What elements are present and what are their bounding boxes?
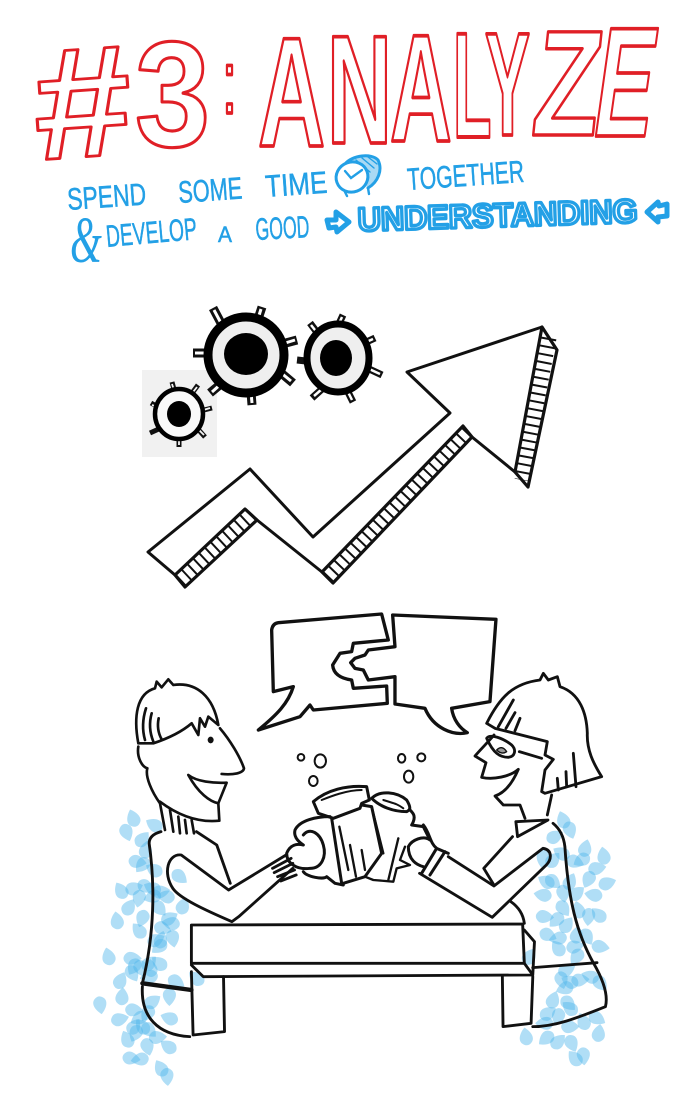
icon: left arrow [647,202,667,222]
title: : [222,32,237,132]
icon: large gear [193,307,297,405]
title: Z [527,0,610,167]
blue splatter [92,807,618,1087]
title: A [390,4,452,174]
left person: body and arm [142,832,296,1037]
subtitle line 1: TIME [264,165,328,204]
speech bubble: right puzzle piece [351,615,496,733]
title: # [27,11,138,194]
subtitle line 2 [70,203,310,276]
icon: small gear [150,382,212,447]
title: 3 [135,11,210,179]
title: N [327,4,392,176]
title: L [453,3,491,170]
icon: medium gear [297,315,382,402]
subtitle line 2: & [70,203,102,276]
subtitle line 1: TOGETHER [406,154,525,197]
table and right leg block [191,924,534,1035]
title: A [258,6,325,180]
title: Y [485,3,530,167]
subtitle line 2: A [218,222,232,247]
gray backing square [142,370,217,457]
title: E [585,0,668,169]
chart arrow [148,327,557,587]
beer mugs and hands [287,786,448,885]
beer bubbles [298,753,425,786]
speech bubble: left puzzle piece [258,614,388,730]
subtitle line 1: SOME [177,171,243,210]
subtitle line 2: GOOD [255,209,310,247]
icon: clock [332,156,380,197]
title [27,0,668,194]
left person: head [136,679,244,833]
right person: head [475,673,602,818]
keyword: understanding: UNDERSTANDING [357,192,638,238]
right person: body and arm [420,820,606,1027]
subtitle line 2: DEVELOP [105,211,198,254]
subtitle line 1: SPEND [66,177,147,217]
subtitle line 1 [66,154,525,217]
icon: right arrow [327,212,349,232]
